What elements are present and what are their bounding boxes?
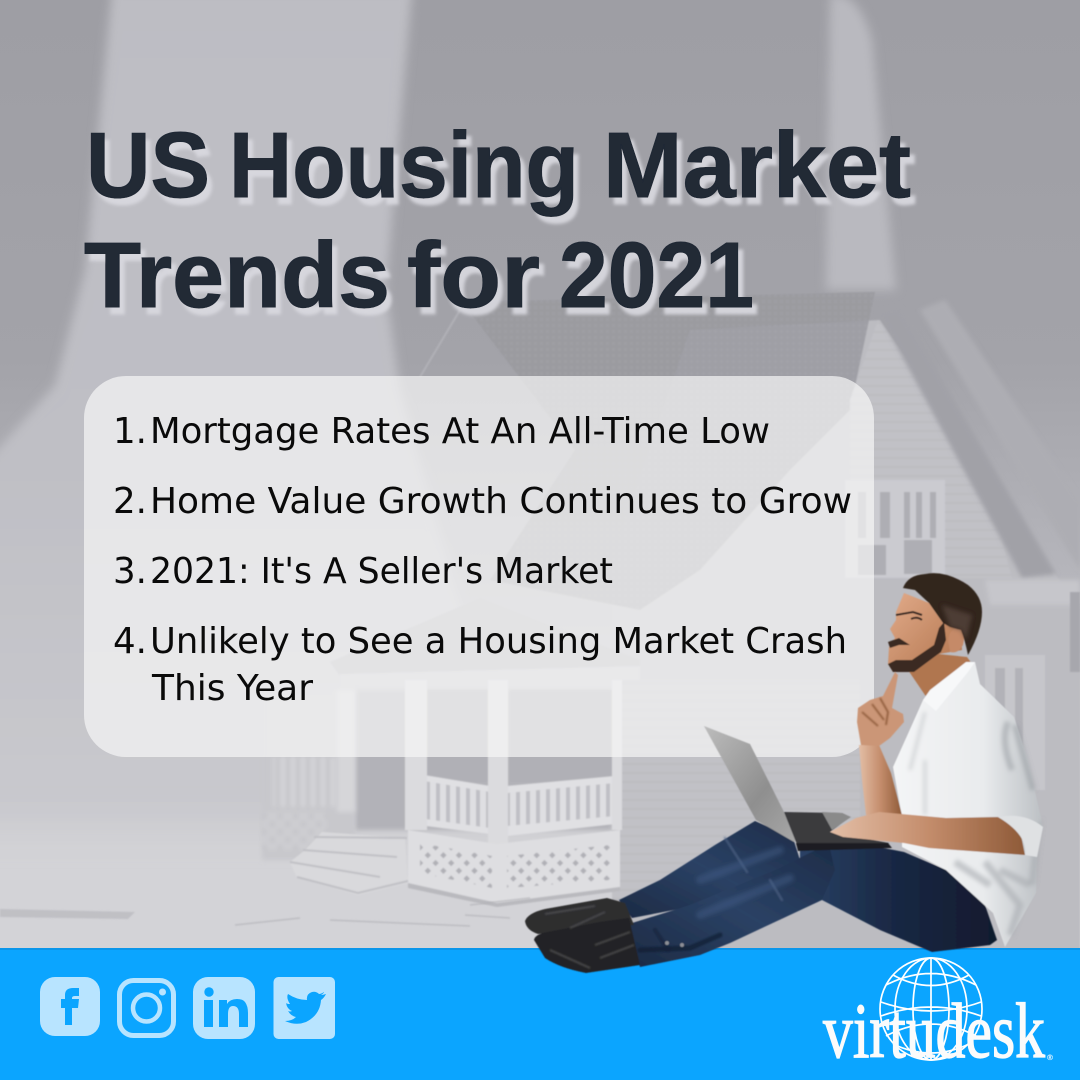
- house: porch posts: [405, 680, 622, 845]
- hand on chin: [857, 672, 904, 746]
- shoe highlights: [545, 906, 634, 968]
- list item 3: 2021: It's A Seller's Market: [150, 551, 613, 592]
- list item 2: Home Value Growth Continues to Grow: [150, 481, 852, 522]
- shirt: [893, 662, 1043, 947]
- title: for: [407, 223, 540, 327]
- house: upper window: [845, 480, 945, 578]
- blurred pale column, right: [826, 0, 896, 290]
- logo: virtudesk: [823, 958, 1054, 1074]
- beard: [888, 622, 946, 672]
- panel: trends list: [84, 376, 874, 757]
- list item 4: Unlikely to See a Housing Market Crash: [150, 621, 847, 662]
- shirt collar: [923, 662, 975, 711]
- neck: [908, 654, 972, 698]
- list item 1: Mortgage Rates At An All-Time Low: [150, 411, 770, 452]
- house: gable wall: [612, 320, 1080, 950]
- lower pale ground: [0, 830, 1080, 1000]
- near leg shin: [629, 844, 835, 967]
- shoe bottom: [534, 918, 640, 973]
- house: gable band: [878, 308, 1056, 578]
- shirt folds: [910, 712, 1038, 935]
- footer bar: [0, 948, 1080, 1080]
- near leg thigh: [800, 843, 997, 952]
- laptop lid: [704, 726, 797, 842]
- title: Housing: [229, 113, 579, 217]
- blurred pale column, left: [0, 0, 470, 950]
- list item 2: 2.: [113, 481, 147, 522]
- house: right windows: [985, 655, 1045, 790]
- list item 4: This Year: [151, 668, 313, 709]
- far leg: [619, 821, 800, 918]
- list item 1: 1.: [113, 411, 147, 452]
- shoe top: [525, 898, 634, 934]
- house: porch roof: [330, 598, 640, 695]
- sleeve cuff: [998, 816, 1043, 857]
- house: left wing, faint: [262, 690, 355, 860]
- house: gable siding: [850, 320, 1012, 578]
- man with laptop: [525, 573, 1043, 973]
- list item 3: 3.: [113, 551, 147, 592]
- house: main roof: [462, 292, 875, 610]
- ear: [948, 628, 964, 652]
- house model: [262, 292, 1080, 950]
- icon: instagram: [120, 980, 174, 1036]
- title: Market: [603, 113, 911, 217]
- raised forearm: [859, 745, 902, 815]
- house: side wall siding: [612, 680, 860, 900]
- icon: twitter: [274, 977, 335, 1039]
- house: porch railing left: [418, 778, 490, 832]
- laptop base: [784, 812, 889, 848]
- house: porch interior: [355, 690, 612, 830]
- title: Trends: [84, 223, 390, 327]
- house: porch railing right: [507, 780, 612, 833]
- moustache: [888, 638, 910, 648]
- title: 2021: [559, 223, 754, 327]
- paper markings: [235, 898, 530, 926]
- hair: [903, 573, 982, 655]
- list item 4: 4.: [113, 621, 147, 662]
- icon: facebook: [40, 977, 100, 1036]
- title: US: [86, 113, 210, 217]
- icon: linkedin: [193, 977, 255, 1039]
- logo globe: [880, 958, 982, 1060]
- lower arm and hand on keyboard: [830, 812, 1025, 855]
- title: [84, 113, 911, 327]
- eye and brow: [896, 612, 922, 620]
- list item 4: [113, 621, 847, 709]
- house: steps: [290, 832, 408, 895]
- jeans highlights: [640, 838, 790, 950]
- house: lattice base: [408, 830, 620, 903]
- logo registered mark: ®: [1046, 1053, 1054, 1062]
- face: [888, 593, 962, 672]
